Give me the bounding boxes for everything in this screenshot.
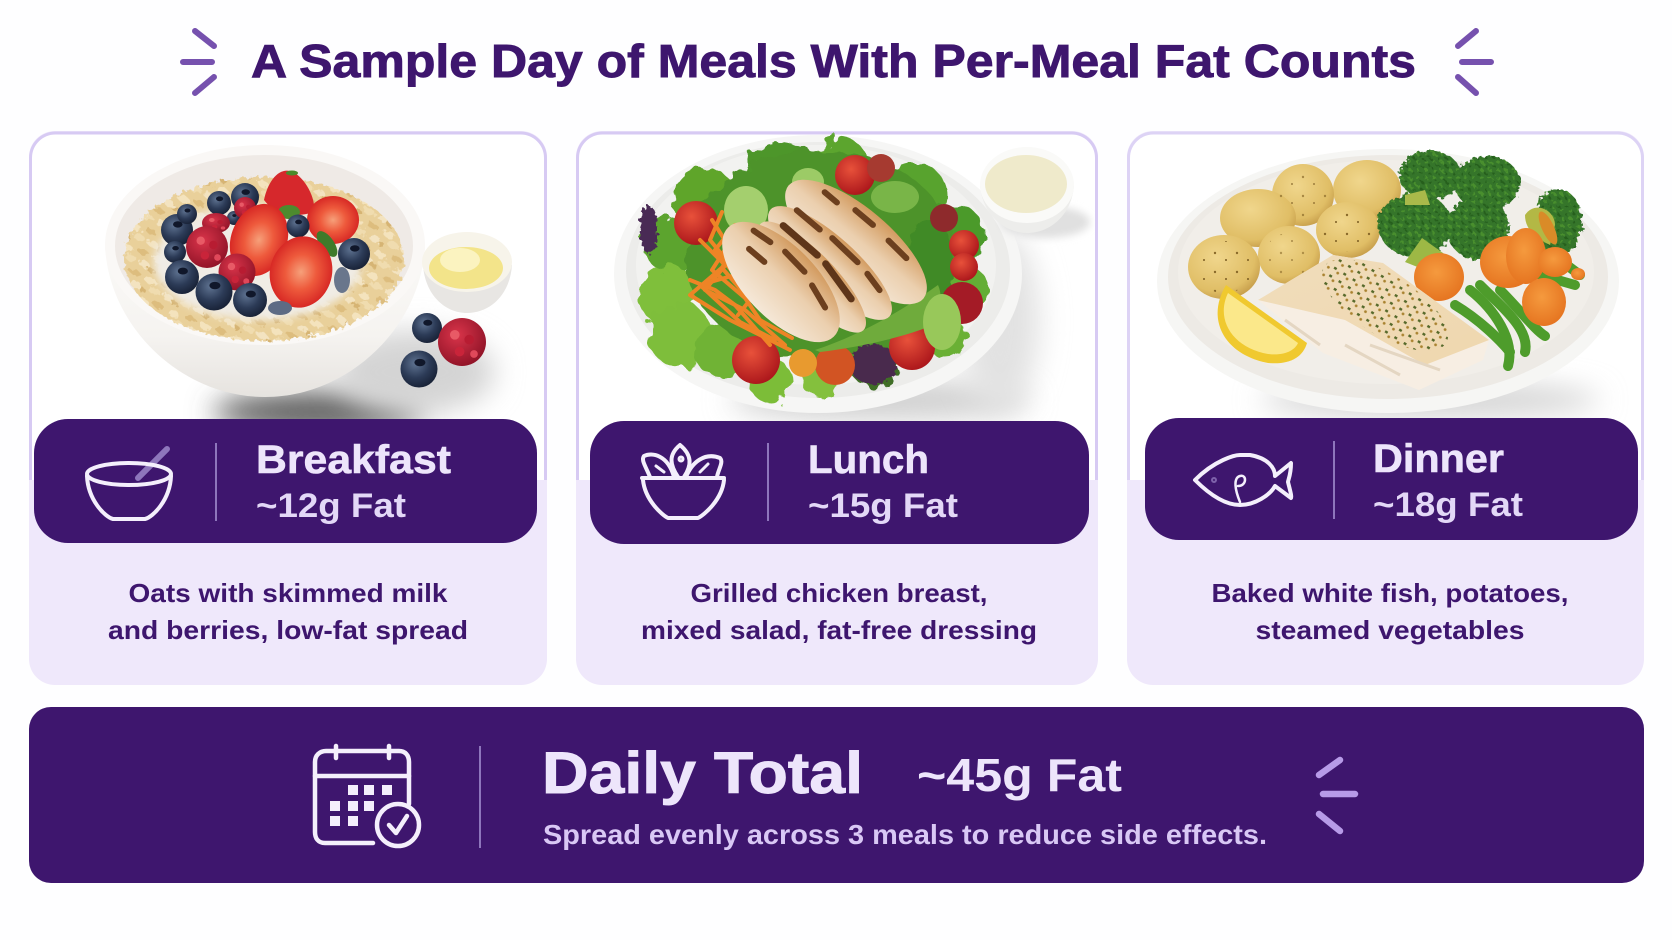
title text: A Sample Day of Meals With Per-Meal Fat Counts (251, 35, 1416, 87)
lunch card background (576, 131, 1098, 685)
photo: oat bowl with berries (105, 145, 512, 432)
carrot shreds (690, 212, 792, 350)
panel: lunch (576, 131, 1098, 685)
photo: grilled chicken salad (614, 135, 1090, 420)
carrots (1414, 228, 1585, 326)
daily total heading: Daily Total (542, 741, 863, 806)
dinner card photo area (1128, 133, 1642, 480)
tomatoes (674, 154, 983, 385)
broccoli (1378, 151, 1582, 268)
photo: baked fish plate (1157, 149, 1619, 418)
lunch fat count: ~15g Fat (808, 487, 958, 525)
icon: cereal bowl (87, 449, 171, 519)
title (183, 31, 1491, 93)
daily total fat count: ~45g Fat (917, 749, 1122, 801)
dinner card background (1127, 131, 1644, 685)
breakfast card photo area (30, 133, 546, 480)
chicken slices (767, 159, 945, 325)
icon: left burst (183, 31, 214, 93)
breakfast label pill (34, 419, 537, 543)
dinner fat count: ~18g Fat (1373, 486, 1523, 524)
icon: salad bowl (642, 445, 724, 518)
butter cup (422, 232, 512, 313)
panel: breakfast (29, 131, 547, 685)
icon: burst (1319, 760, 1355, 831)
panel: dinner (1127, 131, 1644, 685)
lunch divider (767, 443, 769, 521)
lunch label pill (590, 421, 1089, 544)
dressing cup (980, 147, 1090, 238)
breakfast divider (215, 443, 217, 521)
breakfast description (108, 578, 468, 645)
potatoes (1188, 160, 1401, 299)
breakfast meal name: Breakfast (256, 438, 451, 482)
icon: calendar with check (315, 746, 419, 846)
lunch meal name: Lunch (808, 438, 929, 482)
dinner label pill (1145, 418, 1638, 540)
lunch description: mixed salad, fat-free dressing (641, 615, 1037, 645)
lemon wedge (1218, 285, 1307, 363)
baked fish (1258, 241, 1489, 390)
green beans (1455, 260, 1580, 366)
icon: right burst (1458, 31, 1491, 93)
cucumber (815, 285, 941, 352)
breakfast description: and berries, low-fat spread (108, 615, 468, 645)
lunch description: Grilled chicken breast, (690, 578, 988, 608)
daily total background (29, 707, 1644, 883)
dinner divider (1333, 441, 1335, 519)
breakfast description: Oats with skimmed milk (128, 578, 448, 608)
lunch description (641, 578, 1037, 645)
daily total divider (479, 746, 481, 848)
daily total note: Spread evenly across 3 meals to reduce side effects. (543, 819, 1267, 850)
dinner description (1212, 578, 1568, 645)
breakfast fat count: ~12g Fat (256, 487, 406, 525)
dinner meal name: Dinner (1373, 437, 1504, 481)
icon: fish (1195, 455, 1291, 505)
panel: daily total (29, 707, 1644, 883)
dinner description: steamed vegetables (1256, 615, 1524, 645)
lunch card photo area (578, 133, 1096, 480)
breakfast card background (29, 131, 547, 685)
dinner description: Baked white fish, potatoes, (1212, 578, 1568, 608)
